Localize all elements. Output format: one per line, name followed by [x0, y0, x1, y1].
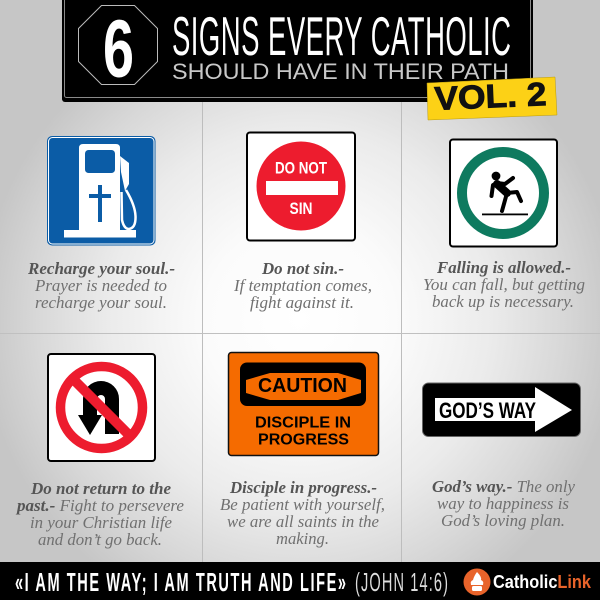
- caption: in your Christian life: [30, 513, 172, 532]
- icon: blue gas pump sign: [47, 136, 156, 246]
- caption: Recharge your soul.-: [27, 259, 175, 278]
- icon: do not enter sign: [247, 132, 355, 240]
- caption: God’s loving plan.: [441, 511, 565, 530]
- caption: Falling is allowed.-: [436, 258, 571, 277]
- icon: orange caution sign: CAUTION: [258, 374, 347, 397]
- icon: no u-turn sign: [48, 354, 155, 461]
- caption: making.: [276, 529, 329, 548]
- icon: do not enter sign: DO NOT: [275, 158, 327, 177]
- icon: orange caution sign: [228, 352, 378, 456]
- caption: we are all saints in the: [227, 512, 379, 531]
- caption: [233, 259, 372, 312]
- caption: Be patient with yourself,: [220, 495, 385, 514]
- caption: past.- Fight to persevere: [15, 496, 184, 515]
- caption: [15, 479, 184, 549]
- subtitle text: SHOULD HAVE IN THEIR PATH: [172, 59, 509, 84]
- icon: do not enter sign: SIN: [290, 199, 312, 218]
- icon: stop octagon with number 6: [78, 4, 158, 94]
- panel: falling is allowed: [423, 140, 585, 311]
- caption: recharge your soul.: [35, 293, 167, 312]
- bible reference: (JOHN 14:6): [355, 569, 448, 597]
- bible quote: «I AM THE WAY; I AM TRUTH AND LIFE»: [15, 569, 346, 597]
- panel: do not sin: [233, 132, 372, 312]
- title banner: [62, 0, 533, 102]
- caption: [27, 259, 175, 312]
- panel: disciple in progress: [220, 352, 385, 548]
- icon: one way arrow sign: GOD’S WAY: [439, 398, 536, 423]
- caption: Do not return to the: [30, 479, 171, 498]
- caption: Disciple in progress.-: [229, 478, 377, 497]
- icon: orange caution sign: PROGRESS: [258, 431, 349, 448]
- caption: Prayer is needed to: [34, 276, 167, 295]
- caption: way to happiness is: [437, 494, 569, 513]
- panel: god's way: [422, 383, 580, 530]
- panel: recharge your soul: [27, 136, 175, 312]
- caption: [432, 477, 575, 530]
- brand name: CatholicLink: [493, 572, 592, 592]
- caption: back up is necessary.: [432, 292, 574, 311]
- caption: If temptation comes,: [233, 276, 372, 295]
- icon: one way arrow sign: [422, 383, 580, 436]
- caption: [423, 258, 585, 311]
- volume badge: VOL. 2: [434, 75, 547, 117]
- caption: fight against it.: [250, 293, 354, 312]
- caption: You can fall, but getting: [423, 275, 585, 294]
- caption: God’s way.- The only: [432, 477, 575, 496]
- icon: catholic link logo: [464, 568, 490, 596]
- caption: and don’t go back.: [38, 530, 162, 549]
- title text: SIGNS EVERY CATHOLIC: [172, 7, 511, 68]
- icon: orange caution sign: DISCIPLE IN: [255, 414, 351, 431]
- footer bar: [0, 562, 600, 600]
- icon: stop octagon with number 6: 6: [103, 4, 134, 94]
- caption: [220, 478, 385, 548]
- icon: green ring falling person sign: [450, 140, 557, 246]
- panel: do not return: [15, 354, 184, 549]
- caption: Do not sin.-: [261, 259, 344, 278]
